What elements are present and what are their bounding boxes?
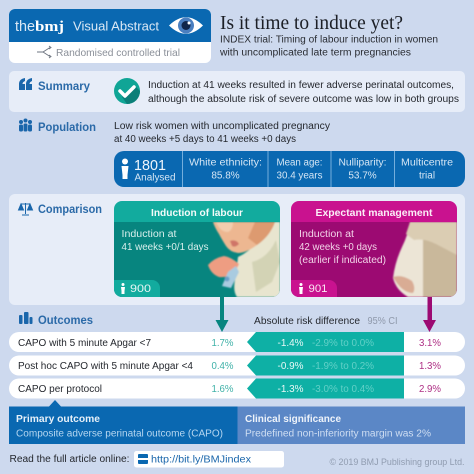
expectant heading: Expectant management <box>316 207 433 219</box>
icon: check <box>114 78 140 104</box>
link box: http://bit.ly/BMJindex <box>151 454 252 466</box>
row 3: CAPO per protocol <box>18 384 102 395</box>
induction heading: Induction of labour <box>151 207 243 219</box>
row 2: -0.9% <box>278 361 304 372</box>
stats bar: Analysed <box>134 172 176 184</box>
analysed: 1801 <box>134 157 166 174</box>
summary text: although the absolute risk of severe outcome was low in both groups <box>148 94 459 105</box>
outcome rows <box>9 332 465 398</box>
arrow: expectant to outcomes <box>423 297 436 332</box>
link box <box>134 451 284 468</box>
title: Is it time to induce yet? <box>220 13 403 34</box>
row 2: 0.4% <box>212 361 234 372</box>
count 900 <box>114 280 160 297</box>
summary text: Induction at 41 weeks resulted in fewer adverse perinatal outcomes, <box>148 80 454 91</box>
white ethnicity: White ethnicity: <box>189 158 262 168</box>
header badge <box>9 9 211 63</box>
photo: pregnant belly <box>393 222 457 297</box>
population heading: Population <box>38 122 96 134</box>
clinical significance: Predefined non-inferiority margin was 2% <box>245 428 431 440</box>
stats bar: 30.4 years <box>276 170 322 182</box>
icon: quote <box>19 78 32 90</box>
icon: eye <box>169 17 203 34</box>
subtitle: INDEX trial: Timing of labour induction in women <box>220 34 438 46</box>
count 901: 901 <box>308 283 328 295</box>
icon: people <box>19 118 32 132</box>
bmj logo bold: bmj <box>35 19 64 35</box>
population text: at 40 weeks +5 days to 41 weeks +0 days <box>114 134 296 145</box>
stats bar: trial <box>419 170 435 182</box>
panel: induction of labour <box>114 201 280 297</box>
row 3: -1.3% <box>278 384 304 395</box>
subtitle: with uncomplicated late term pregnancies <box>219 48 411 58</box>
row 3: 1.6% <box>212 384 234 395</box>
row 2: Post hoc CAPO with 5 minute Apgar <4 <box>18 361 193 372</box>
row 2: 1.3% <box>419 361 441 372</box>
visual abstract label: Visual Abstract <box>73 18 159 34</box>
population text <box>114 121 330 145</box>
comparison heading: Comparison <box>38 204 102 216</box>
arrow: induction to outcomes <box>216 297 228 332</box>
row 3: 2.9% <box>419 384 441 395</box>
expectant text <box>299 229 386 266</box>
row 1: 1.7% <box>212 338 234 349</box>
icon: person <box>122 158 128 179</box>
row 2: -1.9% to 0.2% <box>312 361 374 372</box>
copyright: © 2019 BMJ Publishing group Ltd. <box>330 457 464 467</box>
primary outcome: Composite adverse perinatal outcome (CAPO) <box>16 428 223 440</box>
row 1: 3.1% <box>419 338 441 349</box>
confidence label: 95% CI <box>368 316 398 327</box>
icon: bars <box>19 312 32 324</box>
count 900: 900 <box>130 283 151 295</box>
stats bar: 53.7% <box>348 170 377 182</box>
clinical significance <box>238 406 465 444</box>
row 3: -3.0% to 0.4% <box>312 384 374 395</box>
icon: bmj <box>138 454 148 464</box>
summary heading: Summary <box>38 81 91 93</box>
population text: Low risk women with uncomplicated pregnancy <box>114 121 330 132</box>
multicentre: Multicentre <box>401 158 453 168</box>
summary text <box>148 80 459 105</box>
primary outcome: Primary outcome <box>16 413 100 425</box>
photo: newborn <box>208 222 280 297</box>
panel: outcomes <box>9 312 465 398</box>
trial type: Randomised controlled trial <box>56 47 180 59</box>
icon: randomised arrows <box>37 46 51 58</box>
expectant text: 42 weeks +0 days <box>299 242 377 253</box>
stats bar: 85.8% <box>211 170 240 182</box>
row 1: CAPO with 5 minute Apgar <7 <box>18 338 151 349</box>
expectant text: Induction at <box>299 229 354 240</box>
row 1 <box>18 332 441 352</box>
row 3 <box>18 378 441 398</box>
subtitle <box>219 34 438 58</box>
absolute risk label: Absolute risk difference <box>254 316 360 327</box>
mean age: Mean age: <box>276 158 322 168</box>
row 2 <box>18 356 441 376</box>
panel: comparison <box>9 194 465 305</box>
row 1: -1.4% <box>278 338 304 349</box>
panel: population <box>19 118 465 187</box>
count 901 <box>291 280 337 297</box>
primary outcome <box>9 400 238 444</box>
induction text <box>122 229 208 253</box>
clinical significance: Clinical significance <box>245 413 341 425</box>
induction text: Induction at <box>122 229 177 240</box>
bmj logo: the <box>15 18 35 35</box>
induction text: 41 weeks +0/1 days <box>122 242 208 253</box>
panel: summary <box>9 71 465 112</box>
read online label: Read the full article online: <box>10 454 130 465</box>
icon: scales <box>18 203 32 215</box>
row 1: -2.9% to 0.0% <box>312 338 374 349</box>
stats bar <box>114 151 465 187</box>
panel: expectant management <box>291 201 457 297</box>
outcomes heading: Outcomes <box>38 315 93 327</box>
expectant text: (earlier if indicated) <box>299 255 386 266</box>
nulliparity: Nulliparity: <box>338 158 386 168</box>
